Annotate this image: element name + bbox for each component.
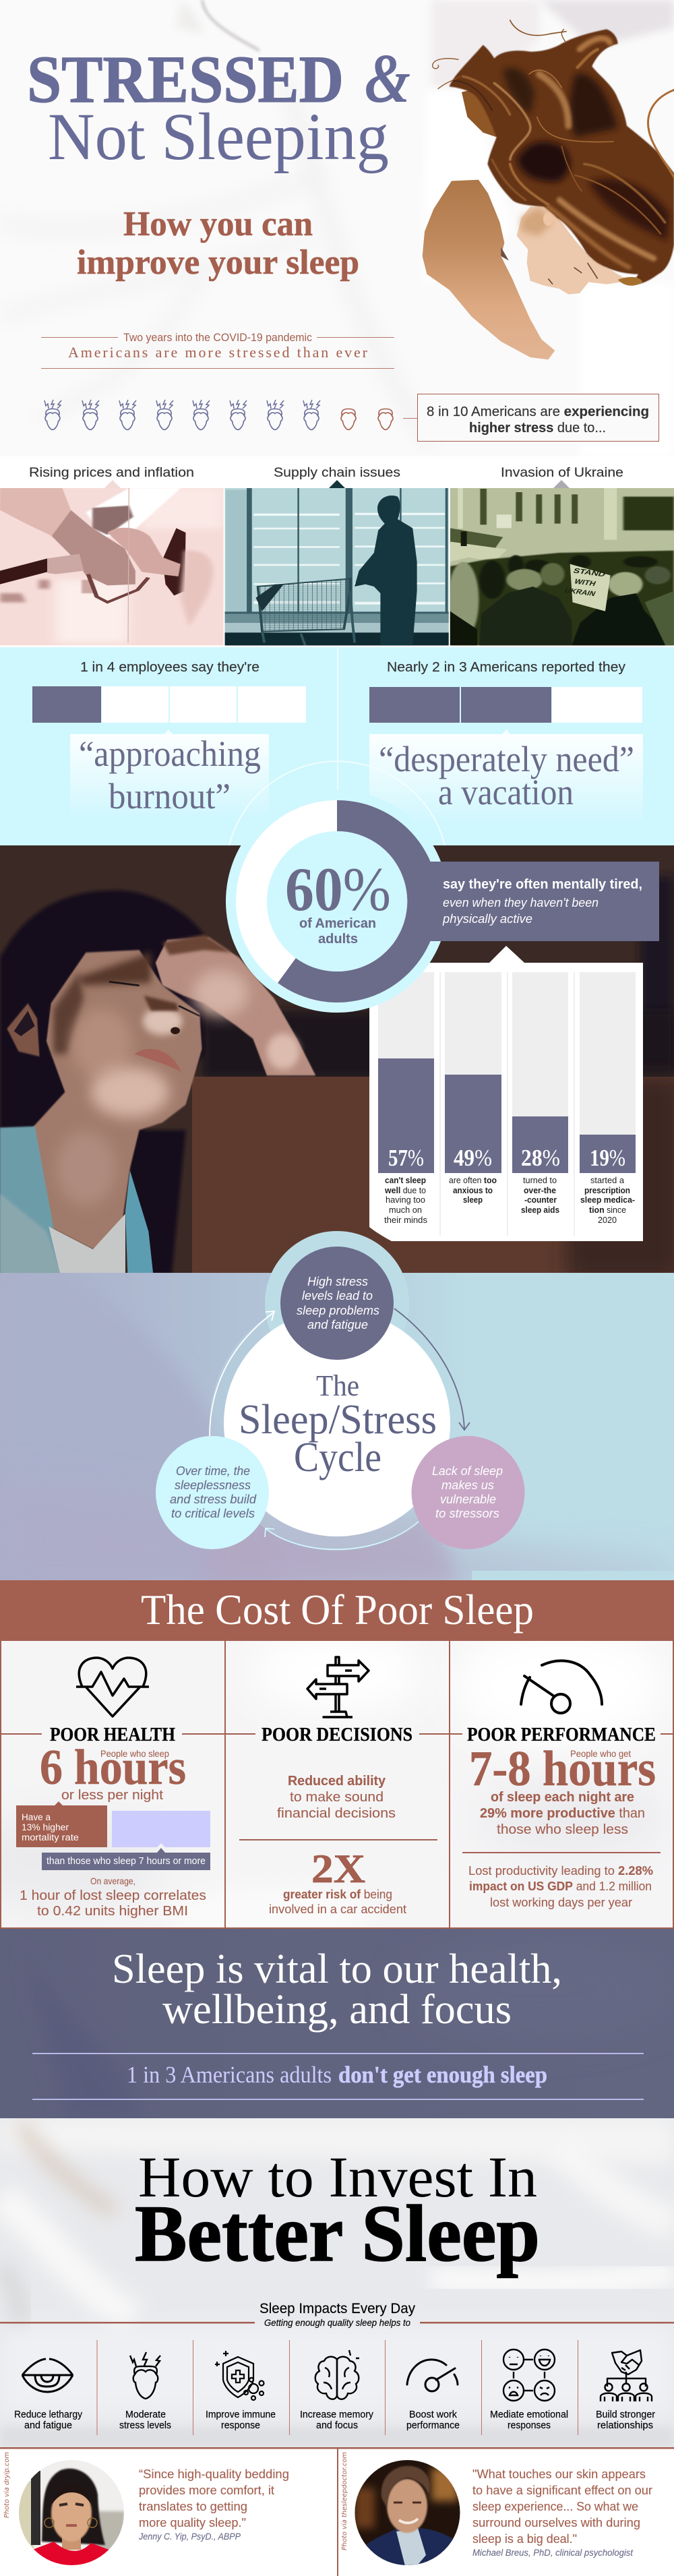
bar: 57%: much on [389,1205,422,1215]
node: over time: and stress build [170,1492,257,1506]
column: poor performance: those who sleep less [497,1822,628,1837]
bar: 49%: anxious to [453,1186,493,1195]
column: poor decisions: 2X [311,1847,365,1891]
panel: burnout and vacation stats: burnout” [109,776,231,816]
bar: 57%: 57% [388,1145,424,1171]
column: poor performance: of sleep each night are [491,1789,634,1805]
heading: the cost of poor sleep: The Cost Of Poor Sleep [141,1586,534,1634]
column: poor health: to 0.42 units higher BMI [37,1904,188,1919]
photo credit: thesleepdoctor: Photo via thesleepdoctor.com [341,2452,348,2550]
node: lack of sleep: makes us [441,1478,494,1492]
subtitle: How you can [123,205,313,243]
quote: Jenny Yip: “Since high-quality bedding [139,2467,289,2481]
panel: sleep is vital: don't get enough sleep [338,2062,547,2088]
column: poor decisions: financial decisions [277,1805,396,1821]
quote: Michael Breus: "What touches our skin appears [472,2467,646,2481]
bar: 28% [512,972,568,1215]
benefit: work performance: performance [406,2420,460,2431]
quote: Jenny Yip: more quality sleep." [139,2516,246,2529]
column: poor performance: 29% more productive than [480,1805,645,1821]
benefit: immune response: response [221,2420,260,2431]
bar: 19%: prescription [584,1186,630,1195]
bar: 19%: sleep medica- [580,1195,635,1205]
benefit: reduce lethargy: and fatigue [24,2420,72,2431]
column: poor health: On average, [90,1876,135,1886]
node: lack of sleep: to stressors [435,1506,499,1520]
node: high stress: and fatigue [307,1317,368,1331]
panel: sleep is vital: wellbeing, and focus [162,1987,512,2033]
title: Not Sleeping [48,99,389,174]
bar: 19%: tion since [589,1205,626,1215]
benefit: stronger relationships [596,2350,655,2431]
callout: mentally tired [377,862,659,941]
subheading: sleep impacts every day [0,2301,674,2328]
benefit: emotional responses: Mediate emotional [490,2409,568,2420]
panel: burnout and vacation stats: a vacation [438,772,574,812]
node: high stress: levels lead to [302,1288,373,1302]
column: poor decisions: Reduced ability [288,1773,386,1789]
bar: 19%: 19% [590,1145,625,1171]
quote: Michael Breus: surround ourselves with during [472,2516,640,2529]
callout: mortality rate: Have a [22,1812,51,1822]
intro statement: Two years into the COVID-19 pandemic [123,331,312,344]
benefit: memory and focus: and focus [316,2420,358,2431]
benefit: memory and focus: Increase memory [300,2409,374,2420]
column: poor health [0,1724,225,1919]
photo credit: dryip: Photo via dryip.com [3,2452,11,2518]
bar: 19%: started a [590,1176,624,1185]
bar: 57%: well due to [384,1186,426,1195]
bar: 28%: turned to [523,1176,557,1185]
causes labels strip: Invasion of Ukraine [501,465,623,480]
photo: Ukraine protest: WITH [573,578,597,588]
callout: mortality rate [16,1801,107,1847]
photo: pumping gas [0,488,224,645]
bar: 19% [580,972,636,1225]
column: poor health: or less per night [61,1788,163,1803]
bar: 57%: having too [386,1195,425,1205]
quote: Michael Breus [472,2467,652,2558]
bar: 28%: sleep aids [521,1205,559,1215]
benefit: work performance: Boost work [409,2409,458,2420]
column: poor decisions: greater risk of being [283,1888,392,1901]
column: poor performance [450,1724,674,1909]
title: & [365,40,410,117]
subtitle [77,205,359,282]
bar: 49%: sleep [463,1195,483,1205]
cycle title [239,1369,437,1480]
cycle title: Cycle [294,1435,381,1480]
arrow: vulnerability to critical levels [265,1522,419,1549]
quote: Michael Breus: Michael Breus, PhD, clinical psychologist [472,2548,634,2558]
callout: seven hours or more: than those who sleep 7 hours or more [47,1856,206,1867]
arrow: stress to sleep loss [394,1309,470,1430]
node: lack of sleep: Lack of sleep [432,1464,503,1478]
benefit: work performance [406,2360,460,2431]
photo: empty store shelves [225,488,449,646]
column: poor performance: 7-8 hours [469,1741,656,1797]
panel: burnout and vacation stats: “approaching [79,733,261,774]
benefit: stronger relationships: Build stronger [596,2409,655,2420]
bar: 19%: 2020 [598,1216,617,1225]
panel: sleep stress cycle background [0,1267,674,1591]
callout: 8 in 10 Americans [403,394,659,441]
callout: 8 in 10 Americans: 8 in 10 Americans are experiencing [427,405,649,419]
callout: mentally tired: physically active [442,912,532,926]
node: high stress: High stress [307,1274,368,1288]
callout: seven hours or more [42,1848,210,1870]
portrait: Jenny Yip [19,2460,125,2569]
donut halo [226,761,448,1013]
benefit: moderate stress: stress levels [119,2420,171,2431]
bar: 57% [378,972,434,1225]
bar: 28%: 28% [521,1145,560,1171]
causes labels strip [0,456,674,488]
bar: 28%: over-the [524,1186,556,1195]
photo: Ukraine protest: STAND [572,568,607,578]
column: poor decisions [226,1724,450,1916]
node: high stress [280,1247,394,1360]
benefit: emotional responses [490,2349,568,2431]
node: over time: to critical levels [171,1506,255,1520]
panel: expert quotes [0,2447,674,2576]
subtitle: improve your sleep [77,243,359,282]
callout: mentally tired: say they're often mentally tired, [443,877,642,892]
heading: how to invest in better sleep: Better Sleep [135,2188,540,2278]
title: STRESSED [27,42,344,117]
node: over time: sleeplessness [175,1478,251,1492]
panel: sleep stats bar chart [369,946,643,1241]
panel: sleep is vital: Sleep is vital to our health, [112,1946,562,1992]
photo: Ukraine protest: UKRAIN [563,587,596,598]
benefit: reduce lethargy [14,2359,83,2431]
panel: burnout and vacation stats: “desperately need” [379,739,634,779]
column: poor health: POOR HEALTH [50,1724,175,1745]
bar: 49% [445,972,501,1205]
quote: Michael Breus: sleep is a big deal." [472,2532,577,2546]
callout: 8 in 10 Americans: higher stress due to... [469,421,606,436]
heading: the cost of poor sleep [0,1580,674,1641]
icon: signpost [307,1657,369,1717]
causes labels strip: Rising prices and inflation [29,465,194,480]
cycle diagram [156,1231,524,1551]
intro statement [41,331,394,369]
column: poor decisions: POOR DECISIONS [262,1724,412,1745]
causes labels strip: Supply chain issues [274,465,400,480]
column: poor decisions: involved in a car accident [269,1903,406,1916]
column: poor health: People who sleep [100,1748,169,1759]
column: poor health: 1 hour of lost sleep correlates [20,1888,206,1903]
title [27,40,410,174]
cycle title: The [316,1369,359,1402]
heading: how to invest in better sleep: How to Invest In [138,2145,537,2209]
benefit: stronger relationships: relationships [597,2420,653,2431]
heading: how to invest in better sleep [135,2145,540,2278]
node: lack of sleep: vulnerable [440,1492,496,1506]
callout: mortality rate: mortality rate [22,1832,79,1843]
benefit: reduce lethargy: Reduce lethargy [14,2409,83,2420]
panel: burnout and vacation stats: Nearly 2 in 3 Americans reported they [387,659,626,675]
photo: Ukraine protest [448,488,674,645]
quote: Michael Breus: sleep experience... So what we [472,2500,638,2513]
cycle title: Sleep/Stress [239,1397,437,1443]
column: poor performance: impact on US GDP and 1.2 million [469,1879,652,1893]
donut chart: 60 percent: adults [318,932,358,947]
column: poor performance: lost working days per year [490,1895,632,1909]
bar: 57%: can't sleep [385,1176,426,1185]
quote: Jenny Yip: translates to getting [139,2500,247,2513]
donut chart: 60 percent [251,800,439,1002]
icon: heart with pulse [76,1658,149,1716]
arrow: sleeplessness back to stress [210,1311,274,1436]
benefit: moderate stress: Moderate [125,2409,166,2420]
panel: cost columns background [0,1625,674,1942]
benefit: emotional responses: responses [508,2420,551,2431]
quote: Jenny Yip: provides more comfort, it [139,2484,274,2497]
panel: sleep is vital: 1 in 3 Americans adults [127,2062,332,2088]
callout: mentally tired: even when they haven't been [443,896,599,909]
benefit: moderate stress [119,2352,171,2431]
column: poor decisions: to make sound [290,1789,384,1805]
column separators [97,2340,578,2435]
subheading: sleep impacts every day: Getting enough quality sleep helps to [264,2318,410,2328]
node: over time [156,1436,269,1549]
comparison block [112,1811,210,1847]
portrait: Michael Breus [355,2460,465,2569]
node: high stress: sleep problems [297,1303,379,1317]
quote: Michael Breus: to have a significant effect on our [472,2484,652,2497]
node: over time: Over time, the [176,1464,250,1478]
intro statement: Americans are more stressed than ever [68,344,368,361]
pictogram: 8 of 10 stressed heads [44,400,393,430]
node: lack of sleep [411,1436,524,1549]
donut chart: 60 percent: 60% [285,855,391,924]
column: poor performance: People who get [570,1748,631,1759]
benefit: immune response: Improve immune [206,2409,276,2420]
bar: 49%: are often too [449,1176,497,1185]
donut chart: 60 percent: of American [299,916,376,931]
subheading: sleep impacts every day: Sleep Impacts Every Day [259,2301,415,2316]
icon: gauge [521,1660,602,1713]
benefit: memory and focus [300,2350,374,2431]
callout: mortality rate: 13% higher [22,1822,69,1832]
photo: sleeping woman [423,20,674,359]
panel: burnout and vacation stats [0,645,674,845]
bar: 57%: their minds [384,1216,427,1225]
column: poor health: 6 hours [40,1740,186,1795]
panel: sleep is vital [0,1929,674,2118]
bar: 49%: 49% [454,1145,492,1171]
bedding background: better sleep section [0,2118,674,2448]
quote: Jenny Yip: Jenny C. Yip, PsyD., ABPP [138,2532,241,2542]
bar: 28%: -counter [524,1195,557,1205]
column: poor performance: Lost productivity leading to 2.28% [468,1863,653,1878]
panel: burnout and vacation stats: 1 in 4 employees say they're [80,659,259,675]
photo: tired woman at laptop [0,845,674,1279]
quote: Jenny Yip [138,2467,289,2542]
benefit: immune response [206,2351,276,2431]
hero background: white bedding [0,0,674,457]
